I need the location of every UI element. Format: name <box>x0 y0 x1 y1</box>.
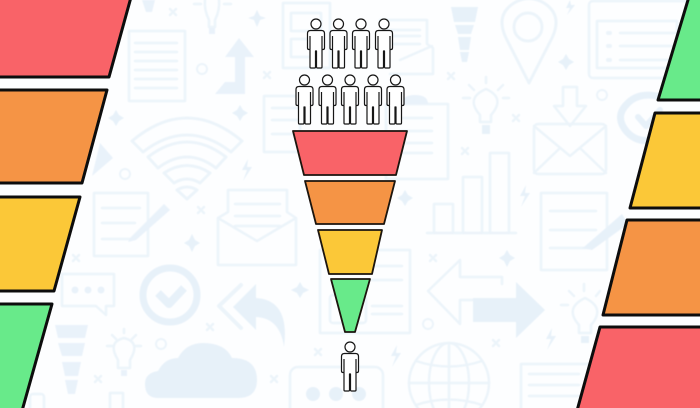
panel: right red band <box>575 327 700 408</box>
icon: left arrow outline <box>428 260 502 324</box>
icon: globe <box>409 343 489 408</box>
panel: right yellow band <box>630 113 700 208</box>
panel: left orange band <box>0 90 107 183</box>
icon: lightning bolts <box>242 0 575 367</box>
icon: clipboard <box>386 95 448 179</box>
icon: arrow up <box>215 38 254 94</box>
icon: reply arrows <box>219 284 285 347</box>
icon: envelope with letter <box>218 190 296 265</box>
panel: left green band <box>0 304 52 408</box>
icon: chat bubble <box>62 274 114 315</box>
icon: document with pencil right <box>541 193 628 270</box>
panel: right orange band <box>603 220 700 315</box>
icon: document center <box>320 250 410 333</box>
icon: chat box bottom <box>290 367 383 408</box>
icon: document with pencil left <box>94 193 170 256</box>
panel: left yellow band <box>0 197 80 291</box>
funnel <box>293 131 407 332</box>
icon: small rectangles bottom <box>30 367 293 408</box>
icon: wifi <box>132 118 242 199</box>
icon: window top <box>283 3 330 68</box>
icon: cross marks <box>73 9 519 382</box>
icon: cloud <box>145 343 257 398</box>
funnel: orange tier <box>305 181 395 224</box>
icon: small circles <box>120 64 607 349</box>
icon: document top left <box>129 31 185 101</box>
people: second row of five <box>296 75 404 124</box>
panel: right green band <box>658 0 700 100</box>
icon: light bulb top <box>194 0 231 34</box>
icon: right arrow solid <box>473 282 545 338</box>
icon: light bulb right <box>463 77 509 134</box>
icon: small funnel top right <box>451 7 478 62</box>
funnel: yellow tier <box>318 230 382 274</box>
icon: light bulb bottom right <box>561 284 600 343</box>
icon: light bulb left <box>107 329 141 376</box>
icon: arrow fragment left <box>92 143 113 176</box>
icon: check circle left <box>143 268 197 322</box>
icon: letter top center <box>380 20 433 74</box>
funnel: green tier <box>331 279 370 332</box>
icon: location pin <box>502 0 556 83</box>
person: single converted customer <box>342 342 358 391</box>
icon: list window <box>589 1 689 78</box>
icon: envelope with down arrow <box>534 87 606 174</box>
icon: small funnel left <box>55 325 88 394</box>
people: top row of four <box>308 19 392 68</box>
panel: left red band <box>0 0 133 77</box>
icon: check circle right <box>620 95 664 141</box>
icon: small funnel top <box>142 0 155 12</box>
icon: bar chart <box>427 153 516 233</box>
icon: sparkles <box>108 10 574 298</box>
icon: document bottom right <box>521 364 589 408</box>
funnel: red tier <box>293 131 407 175</box>
icon: document middle left <box>264 96 300 152</box>
